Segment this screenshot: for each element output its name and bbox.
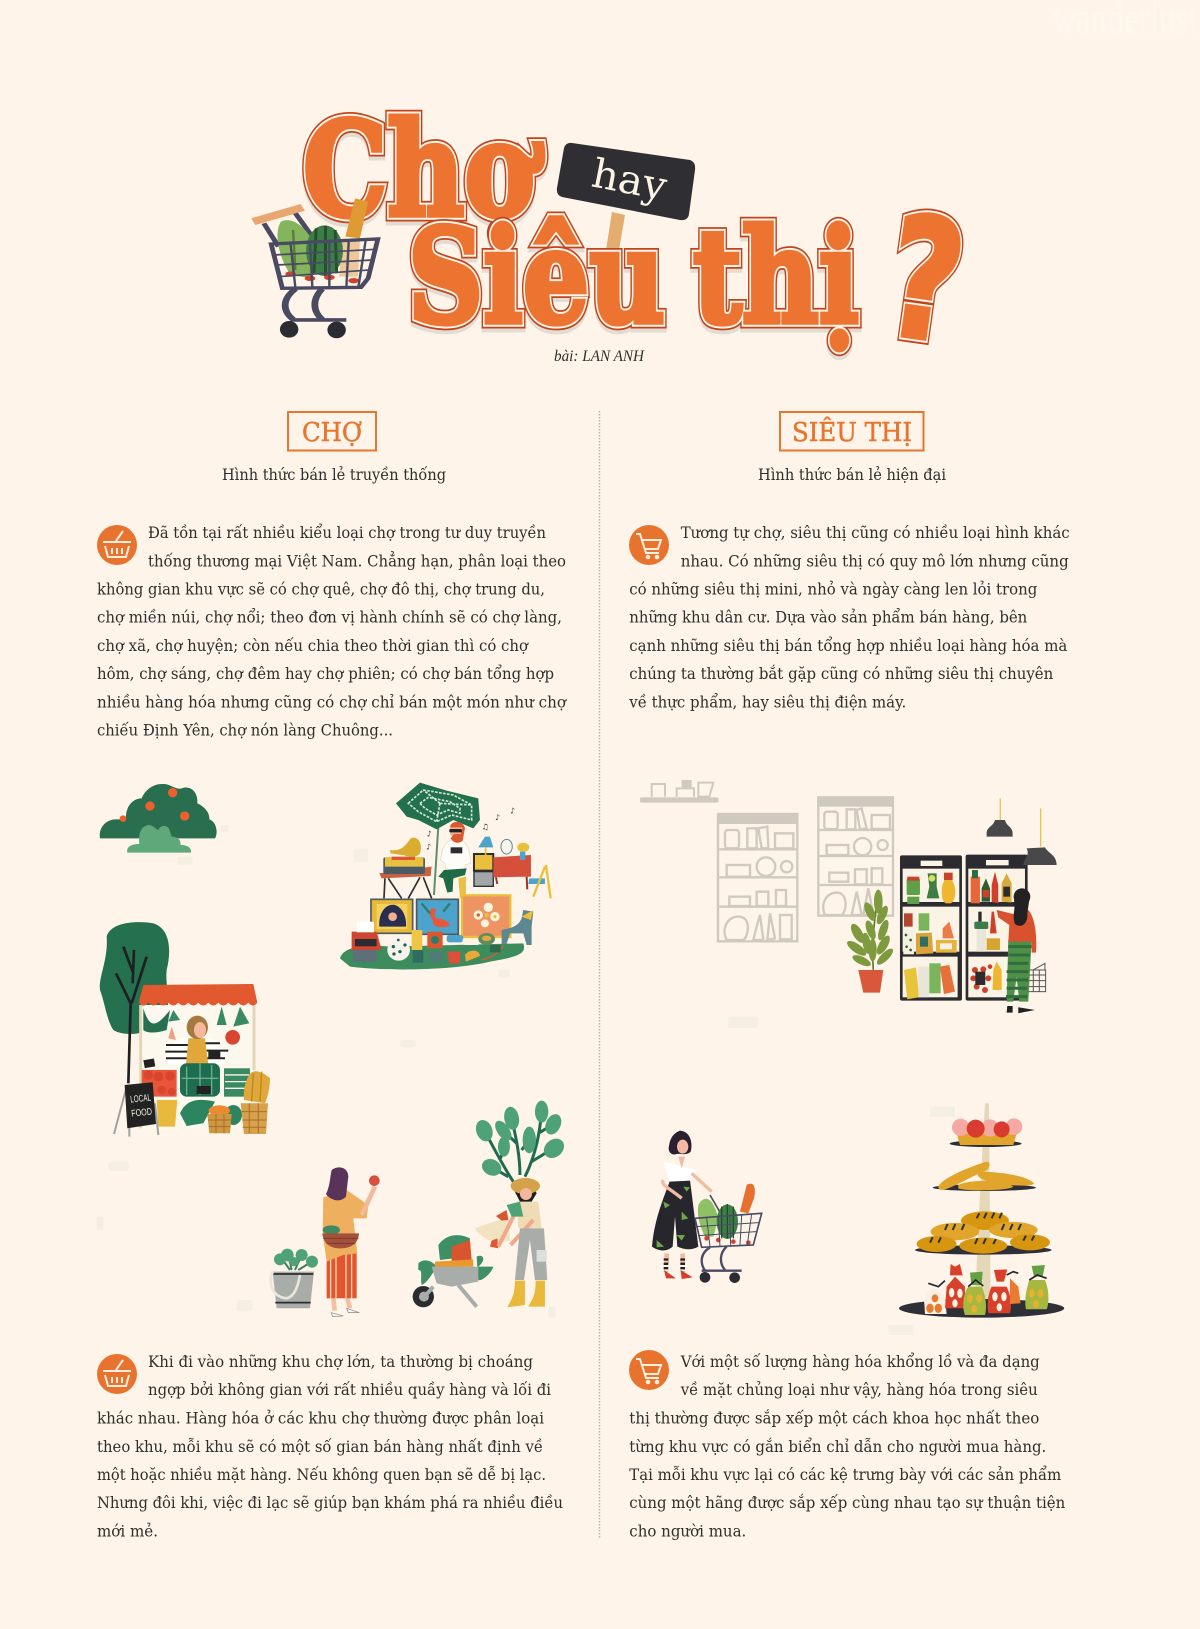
title question mark: ? xyxy=(877,180,975,381)
title words: Siêu thị: thị xyxy=(693,204,859,357)
illustration: gardener with wheelbarrow xyxy=(413,1101,568,1307)
text block: supermarket paragraph 2 xyxy=(629,1350,1065,1540)
title words: Siêu thị: thị xyxy=(693,200,859,353)
illustration: gray background shelves xyxy=(640,780,893,941)
text block: supermarket paragraph 1: về thực phẩm, hay siêu thị điện máy. xyxy=(628,692,906,712)
text block: market paragraph 1: chợ xã, chợ huyện; còn nếu chia theo thời gian thì có chợ xyxy=(97,636,529,655)
heading: SIÊU THỊ: SIÊU THỊ xyxy=(792,416,912,448)
illustration: local food stall xyxy=(100,922,416,1137)
illustration: refrigerators and shopper xyxy=(728,798,1057,1028)
text block: market paragraph 2: ngợp bởi không gian với rất nhiều quầy hàng và lối đi xyxy=(148,1380,551,1399)
text block: market paragraph 2: mới mẻ. xyxy=(97,1521,158,1540)
illustration: woman pushing shopping cart xyxy=(652,1131,762,1283)
icon: basket xyxy=(97,525,137,565)
title words: Siêu thị: Siêu xyxy=(408,204,665,357)
title: Chợ hay Siêu thị? xyxy=(303,93,975,381)
text block: supermarket paragraph 1: chúng ta thường bắt gặp cũng có những siêu thị chuyên xyxy=(629,664,1053,683)
text block: market paragraph 1: hôm, chợ sáng, chợ đêm hay chợ phiên; có chợ bán tổng hợp xyxy=(97,664,554,683)
text block: supermarket paragraph 1: có những siêu thị mini, nhỏ và ngày càng len lỏi trong xyxy=(629,580,1037,598)
illustration: local food stall: FOOD xyxy=(131,1107,153,1120)
text block: market paragraph 2: Khi đi vào những khu chợ lớn, ta thường bị choáng xyxy=(148,1352,533,1371)
subheading: modern retail: Hình thức bán lẻ hiện đại xyxy=(758,465,946,484)
text block: market paragraph 1 xyxy=(97,523,567,740)
illustration: flea market seller: ♪ xyxy=(510,806,515,815)
illustration: flea market seller xyxy=(340,783,551,977)
heading: CHỢ: CHỢ xyxy=(302,418,362,448)
text block: market paragraph 1: không gian khu vực sẽ có chợ quê, chợ đô thị, chợ trung du, xyxy=(97,580,545,598)
text block: market paragraph 1: Đã tồn tại rất nhiều kiểu loại chợ trong tư duy truyền xyxy=(148,523,546,542)
title question mark: ? xyxy=(877,180,975,381)
text block: supermarket paragraph 1: nhau. Có những siêu thị có quy mô lớn nhưng cũng xyxy=(681,551,1069,570)
illustration: flea market seller: ♪ xyxy=(426,842,431,851)
illustration: bush with oranges xyxy=(100,784,229,865)
text block: supermarket paragraph 2: cho người mua. xyxy=(629,1521,746,1540)
subheading: traditional retail: Hình thức bán lẻ truyền thống xyxy=(222,465,446,484)
illustration: potted plant xyxy=(845,890,895,993)
text block: market paragraph 1: chiếu Định Yên, chợ nón làng Chuông... xyxy=(97,721,393,740)
heading: CHỢ xyxy=(288,412,376,450)
title words: Siêu thị: Siêu xyxy=(408,200,665,353)
text block: supermarket paragraph 2: cùng một hãng được sắp xếp cùng nhau tạo sự thuận tiện xyxy=(629,1493,1065,1512)
icon: cart xyxy=(629,525,669,565)
icon: shopping cart in title xyxy=(253,198,378,338)
title question mark: ? xyxy=(877,180,975,381)
text block: supermarket paragraph 1: những khu dân cư. Dựa vào sản phẩm bán hàng, bên xyxy=(629,608,1027,627)
illustration: tiered food stand xyxy=(888,1103,1064,1335)
illustration: local food stall: LOCAL xyxy=(130,1092,152,1106)
text block: supermarket paragraph 2: từng khu vực có gắn biển chỉ dẫn cho người mua hàng. xyxy=(629,1437,1046,1456)
text block: market paragraph 2: một hoặc nhiều mặt hàng. Nếu không quen bạn sẽ dễ bị lạc. xyxy=(97,1465,546,1484)
text block: market paragraph 2: theo khu, mỗi khu sẽ có một số gian bán hàng nhất định về xyxy=(97,1437,543,1456)
title word: Chợ: Chợ xyxy=(303,97,543,250)
text block: market paragraph 2: khác nhau. Hàng hóa ở các khu chợ thường được phân loại xyxy=(97,1408,544,1427)
text block: market paragraph 1: thống thương mại Việt Nam. Chẳng hạn, phân loại theo xyxy=(148,550,566,570)
sign: hay xyxy=(557,143,695,250)
illustration: flea market seller: ♪ xyxy=(427,830,432,839)
icon: basket xyxy=(97,1354,137,1394)
text block: supermarket paragraph 2: Tại mỗi khu vực lại có các kệ trưng bày với các sản phẩm xyxy=(629,1465,1061,1484)
sign: hay: hay xyxy=(588,151,671,210)
title words: Siêu thị: thị xyxy=(693,200,859,353)
column divider xyxy=(598,411,600,1538)
title words: Siêu thị: thị xyxy=(693,200,859,353)
text block: supermarket paragraph 1: Tương tự chợ, siêu thị cũng có nhiều loại hình khác xyxy=(681,523,1070,542)
title word: Chợ: Chợ xyxy=(303,93,543,246)
text block: market paragraph 2: Nhưng đôi khi, việc đi lạc sẽ giúp bạn khám phá ra nhiều điều xyxy=(97,1493,563,1512)
text block: market paragraph 1: chợ miền núi, chợ nổi; theo đơn vị hành chính sẽ có chợ làng, xyxy=(97,608,562,627)
text block: supermarket paragraph 2: Với một số lượng hàng hóa khổng lồ và đa dạng xyxy=(680,1352,1040,1371)
title word: Chợ: Chợ xyxy=(303,93,543,246)
title word: Chợ: Chợ xyxy=(303,93,543,246)
illustration: flea market seller: ♫ xyxy=(482,822,489,831)
title words: Siêu thị xyxy=(408,200,859,357)
text block: supermarket paragraph 1: cạnh những siêu thị bán tổng hợp nhiều loại hàng hóa mà xyxy=(629,636,1068,655)
heading: SIÊU THỊ xyxy=(780,412,924,450)
text block: supermarket paragraph 2: về mặt chủng loại như vậy, hàng hóa trong siêu xyxy=(680,1380,1038,1399)
text block: market paragraph 2 xyxy=(97,1352,563,1540)
text block: market paragraph 1: nhiều hàng hóa nhưng cũng có chợ chỉ bán một món như chợ xyxy=(97,692,567,712)
title words: Siêu thị: Siêu xyxy=(408,200,665,353)
text block: supermarket paragraph 2: thị thường được sắp xếp một cách khoa học nhất theo xyxy=(629,1408,1039,1427)
illustration: woman with apple and bucket xyxy=(97,1162,556,1317)
text block: supermarket paragraph 1 xyxy=(628,523,1070,712)
byline: bài: LAN ANH xyxy=(554,348,645,365)
icon: cart xyxy=(629,1350,669,1390)
title words: Siêu thị: Siêu xyxy=(408,200,665,353)
illustration: flea market seller: ♪ xyxy=(495,813,500,822)
